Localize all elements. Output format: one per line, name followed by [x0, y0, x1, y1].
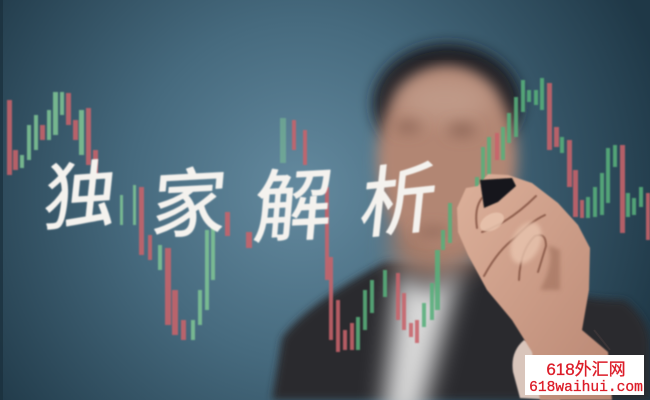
shirt and collar: [382, 266, 462, 400]
watermark box: 618外汇网: [546, 360, 626, 379]
left edge band: [0, 0, 3, 400]
head: [377, 66, 517, 250]
forehead highlight: [397, 78, 493, 122]
shirt cuff: [512, 340, 560, 400]
heading: handwritten title: 解: [250, 141, 338, 259]
watermark box: 618waihui.com: [529, 380, 643, 396]
neck: [392, 190, 490, 280]
suit jacket: [272, 262, 650, 400]
red candles: [7, 83, 650, 352]
finger shadow under knuckles: [540, 245, 560, 290]
hand and wrist: [457, 174, 612, 400]
knuckle highlight: [504, 217, 548, 269]
person: blurred businessman: [272, 44, 650, 400]
heading: handwritten title: [40, 135, 443, 259]
wrist strap: [594, 330, 610, 350]
marker pen: [480, 178, 516, 208]
heading: handwritten title: 家: [148, 143, 231, 254]
fingertip highlight: [477, 209, 507, 235]
finger creases: [476, 196, 546, 280]
heading: handwritten title: 析: [356, 136, 443, 255]
heading: handwritten title: 独: [40, 135, 123, 245]
hair: [373, 44, 521, 164]
icon: hand holding marker: [457, 174, 612, 400]
blurred eyes and mouth: [395, 122, 476, 236]
green candles: [20, 92, 286, 340]
candlestick chart: price line across the picture: [7, 78, 650, 352]
watermark box: [525, 355, 644, 396]
